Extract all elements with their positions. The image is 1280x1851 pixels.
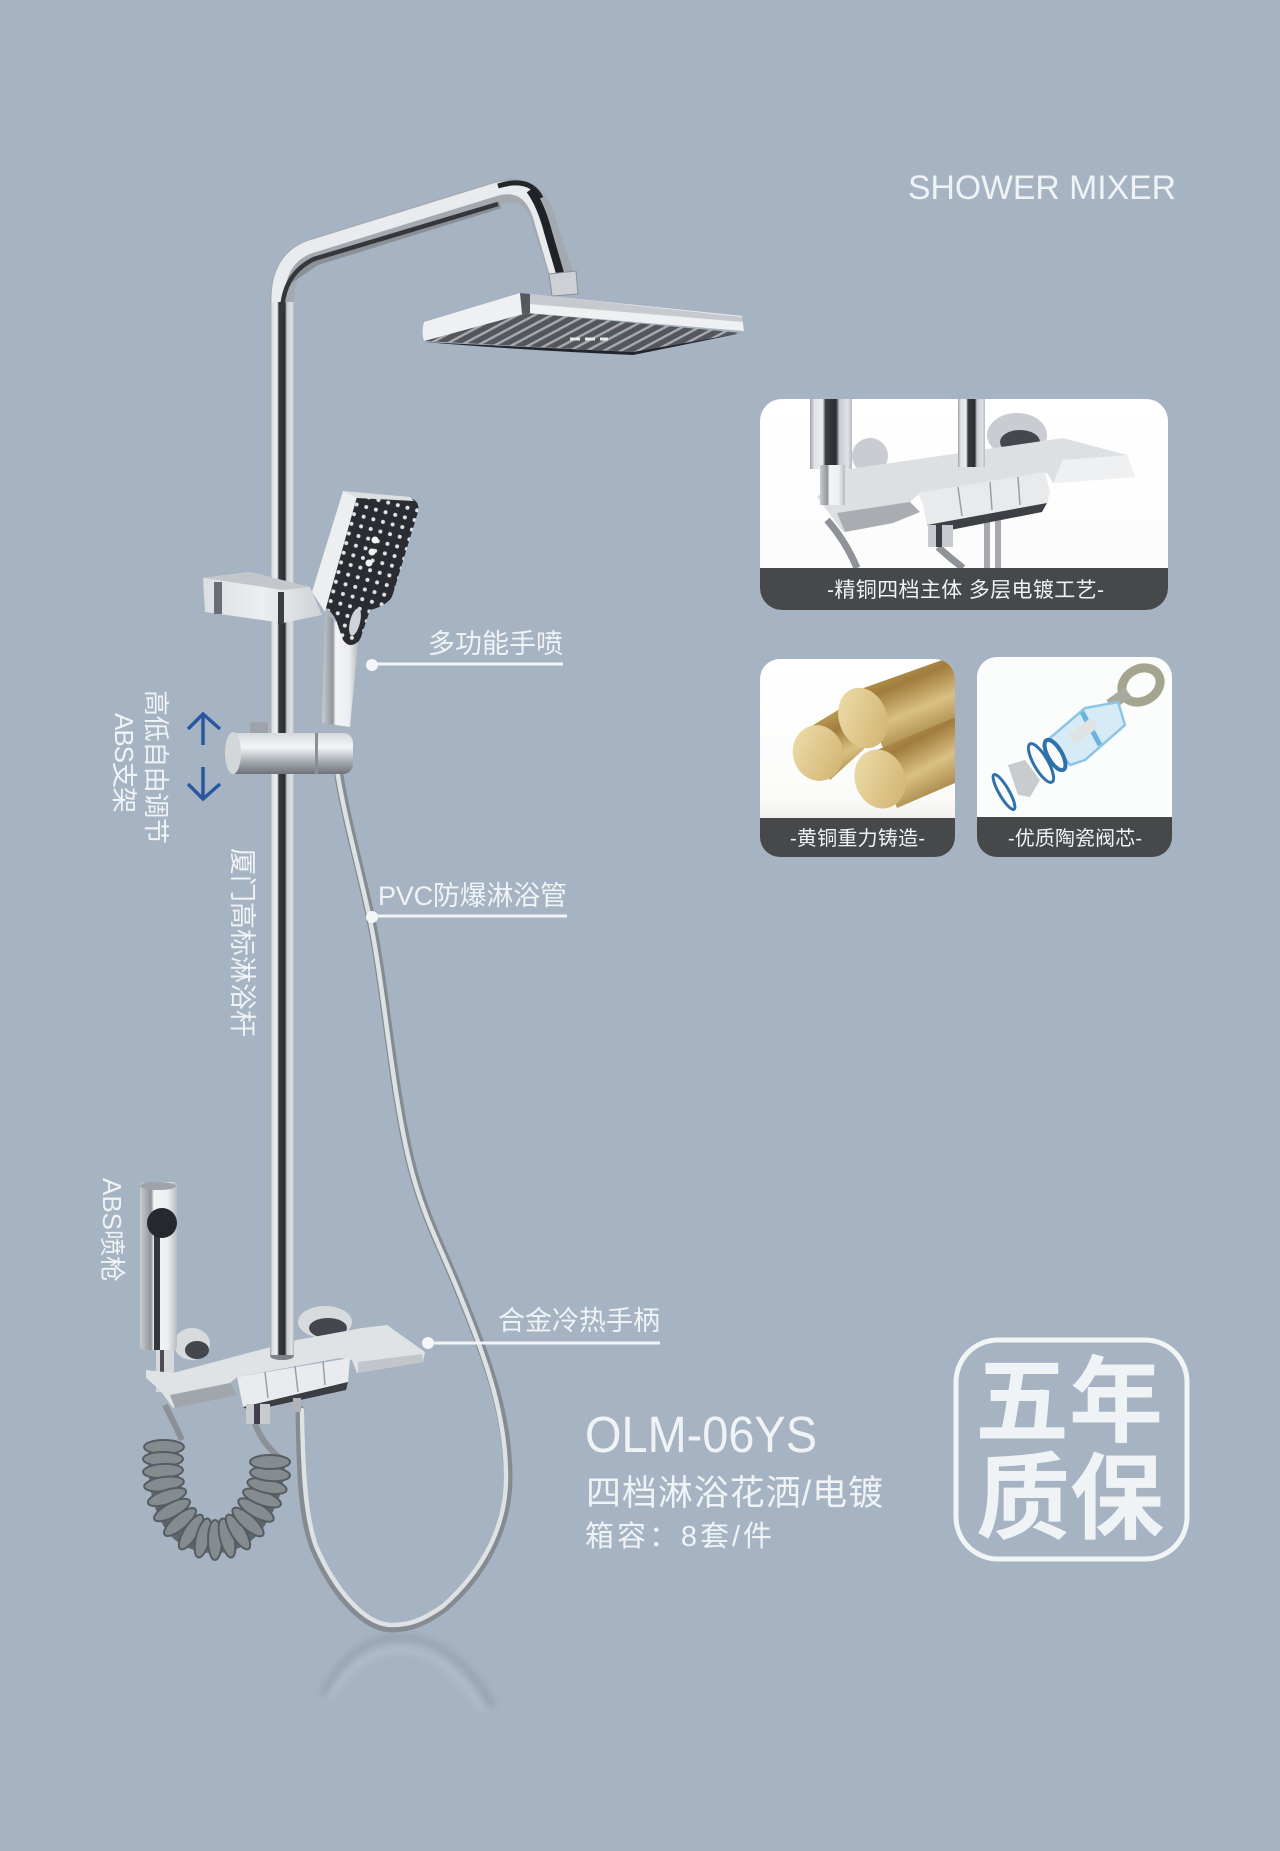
caption: -黄铜重力铸造- bbox=[790, 827, 925, 850]
wall mounts bbox=[174, 1306, 352, 1360]
long hose bbox=[300, 770, 508, 1628]
product description: 四档淋浴花洒/电镀 bbox=[586, 1474, 883, 1513]
callout: PVC hose: PVC防爆淋浴管 bbox=[378, 881, 567, 911]
panel: main body detail bbox=[760, 399, 1168, 610]
callout: multifunction hand shower: 多功能手喷 bbox=[428, 629, 563, 659]
callout: PVC hose bbox=[366, 881, 567, 923]
callout: alloy handle: 合金冷热手柄 bbox=[498, 1306, 660, 1336]
coiled spray hose bbox=[143, 1405, 291, 1560]
carton quantity: 箱容：8套/件 bbox=[585, 1520, 772, 1553]
overhead shower head bbox=[422, 293, 744, 355]
curved arm and neck bbox=[278, 183, 563, 312]
icon: up and down arrows bbox=[188, 714, 220, 799]
product: shower column bbox=[140, 183, 744, 1712]
panel: ceramic cartridge bbox=[977, 657, 1172, 857]
hand shower holder bracket bbox=[203, 572, 322, 624]
label: shower rod: 厦门高标淋浴杆 bbox=[227, 848, 257, 1037]
panel: brass casting bbox=[760, 659, 955, 857]
caption: -优质陶瓷阀芯- bbox=[1008, 827, 1142, 850]
label: height adjustable: 高低自由调节 bbox=[141, 690, 171, 844]
model number: OLM-06YS bbox=[585, 1406, 817, 1463]
reflection under hose bbox=[323, 1637, 493, 1712]
main riser pole bbox=[270, 300, 294, 1357]
callout: alloy handle bbox=[422, 1306, 660, 1349]
caption: -精铜四档主体 多层电镀工艺- bbox=[827, 579, 1104, 602]
badge: five year warranty: 五年 bbox=[975, 1349, 1163, 1454]
badge: five year warranty bbox=[956, 1340, 1187, 1559]
heading: SHOWER MIXER: SHOWER MIXER bbox=[908, 169, 1176, 207]
label: ABS bracket: ABS支架 bbox=[109, 713, 139, 813]
sliding holder bbox=[225, 722, 353, 774]
shower head collar bbox=[549, 271, 578, 296]
label: ABS spray gun: ABS喷枪 bbox=[97, 1178, 127, 1282]
badge: five year warranty: 质保 bbox=[976, 1446, 1164, 1551]
mixer valve body bbox=[146, 1325, 425, 1424]
hand shower bbox=[312, 491, 418, 727]
callout: multifunction hand shower bbox=[366, 629, 563, 671]
handheld spray gun bbox=[140, 1182, 177, 1392]
